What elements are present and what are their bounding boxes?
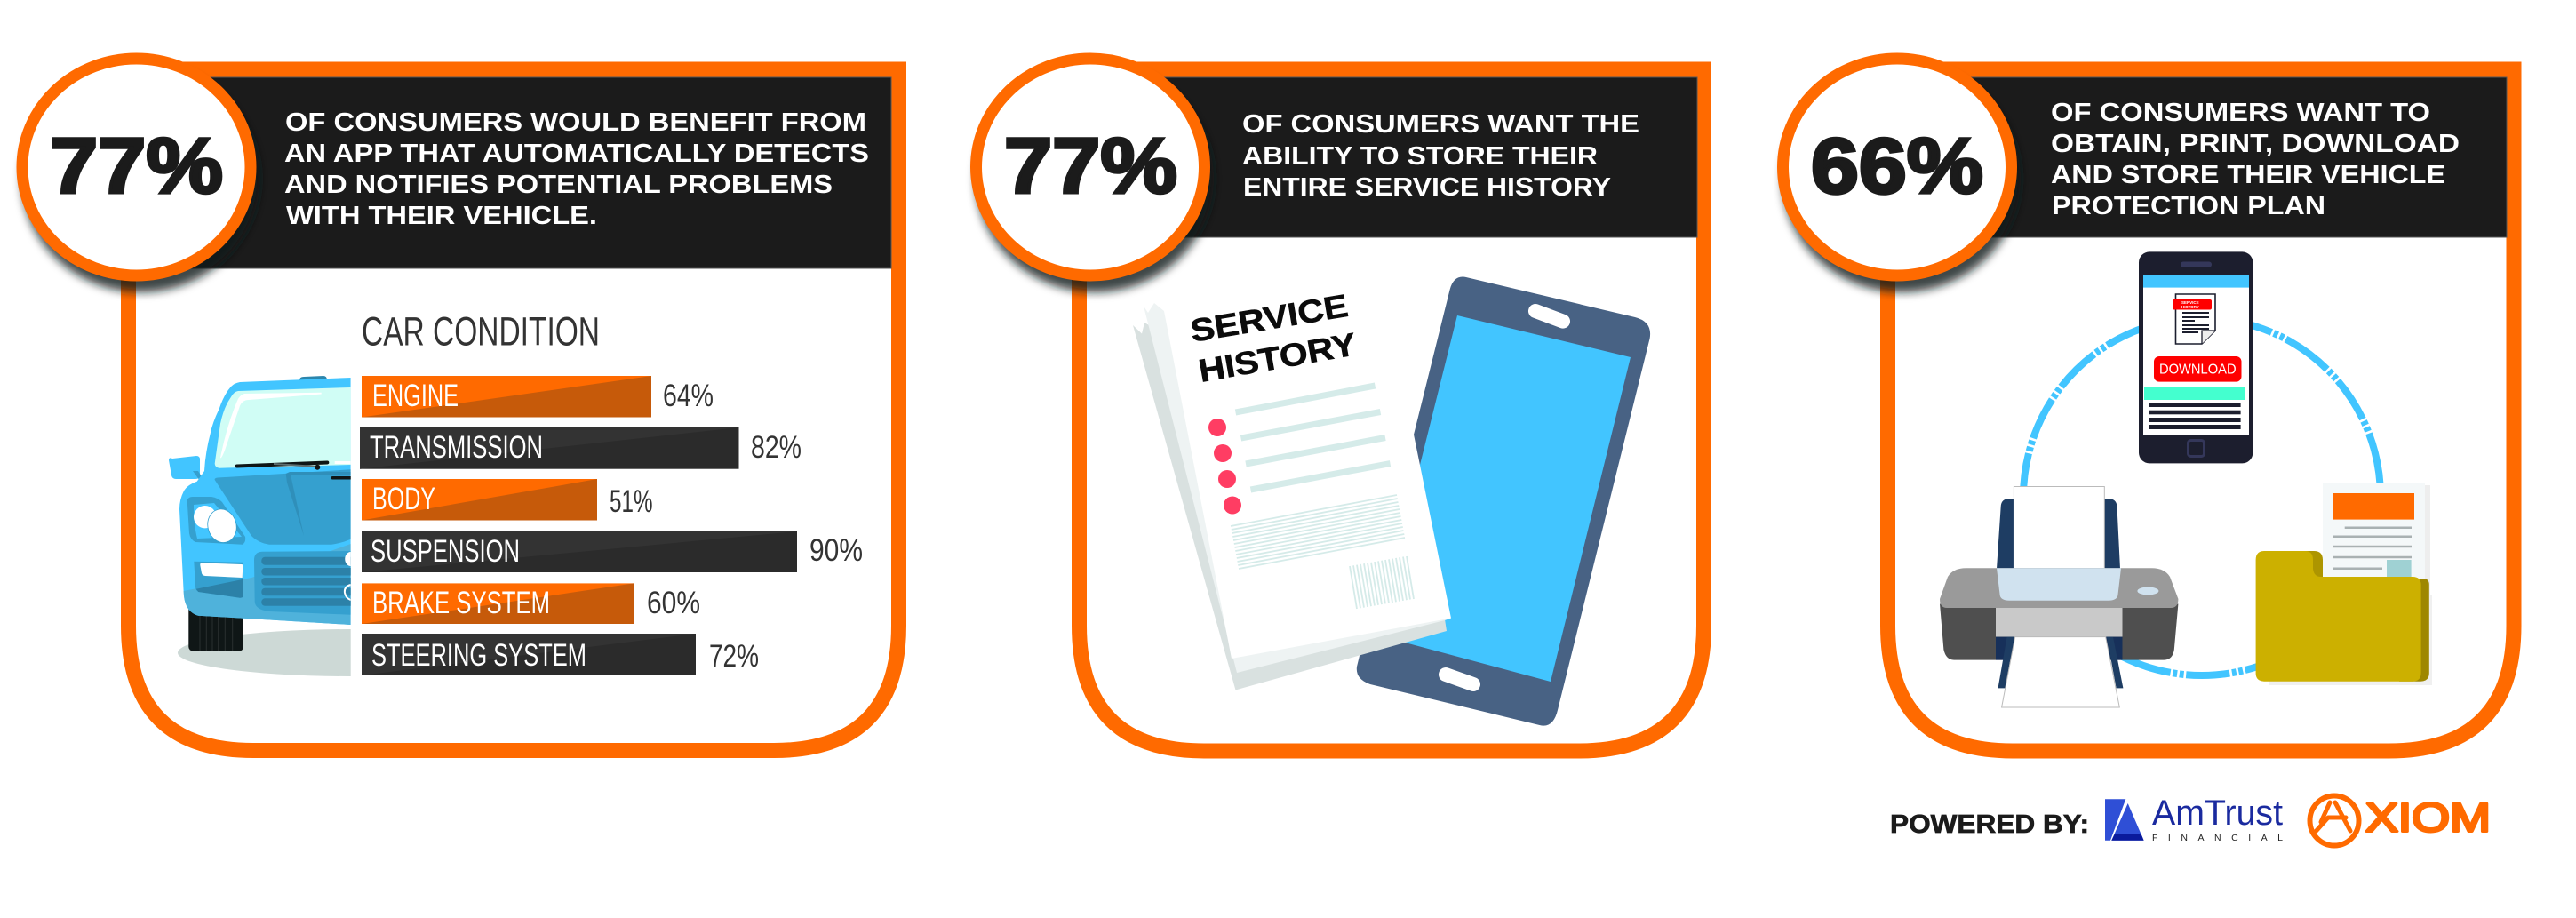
stat badge 77%: [976, 59, 1214, 292]
powered by label: POWERED BY:: [1890, 810, 2089, 839]
logo: AmTrust Financial: [2105, 794, 2283, 843]
bar: engine 64%: 64%: [663, 379, 714, 413]
bar: engine 64%: [362, 376, 714, 418]
bar: steering system 72%: 72%: [709, 639, 759, 674]
logo: Axiom: [2310, 794, 2491, 846]
bar: steering system 72%: [362, 634, 759, 675]
bar: suspension 90%: [362, 531, 863, 572]
header text 1: AN APP THAT AUTOMATICALLY DETECTS: [284, 140, 869, 168]
bar: brake system 60%: 60%: [647, 586, 700, 620]
header text 1: WITH THEIR VEHICLE.: [286, 202, 597, 230]
bar: brake system 60%: BRAKE SYSTEM: [372, 586, 550, 620]
icon: phone with download: SERVICE: [2181, 300, 2199, 305]
document title: SERVICE: [1188, 287, 1351, 349]
stat badge 77%: 77%: [50, 122, 223, 210]
bar: transmission 82%: TRANSMISSION: [370, 430, 543, 465]
icon: phone with download: DOWNLOAD: [2159, 363, 2237, 377]
header text 2: ABILITY TO STORE THEIR: [1242, 142, 1598, 171]
bar: steering system 72%: STEERING SYSTEM: [371, 638, 586, 673]
bar: body 51%: BODY: [372, 482, 435, 516]
logo: AmTrust Financial: FINANCIAL: [2152, 833, 2283, 843]
panel frame 3: [1887, 69, 2514, 751]
header text 3: OBTAIN, PRINT, DOWNLOAD: [2051, 130, 2460, 158]
bar: engine 64%: ENGINE: [372, 379, 459, 413]
logo: AmTrust Financial: AmTrust: [2152, 794, 2283, 833]
header text 2: [1242, 110, 1639, 202]
stat badge 77%: [21, 59, 259, 292]
icon: phone with download: HISTORY: [2181, 305, 2199, 309]
footer: powered by: [1890, 794, 2491, 846]
bar: suspension 90%: SUSPENSION: [371, 534, 520, 569]
icon: folder with document: [2256, 483, 2432, 685]
header text 2: OF CONSUMERS WANT THE: [1242, 110, 1639, 139]
bar: transmission 82%: [360, 427, 802, 469]
panel: vehicle protection plan: [1782, 59, 2514, 751]
header text 3: AND STORE THEIR VEHICLE: [2051, 161, 2445, 189]
panel: car condition: [21, 59, 899, 750]
header text 3: PROTECTION PLAN: [2052, 192, 2325, 220]
bar: suspension 90%: 90%: [809, 533, 863, 568]
stat badge 77%: 77%: [1004, 122, 1177, 210]
header text 1: AND NOTIFIES POTENTIAL PROBLEMS: [284, 171, 833, 199]
bar: transmission 82%: 82%: [751, 430, 802, 465]
header band 1: [136, 77, 891, 268]
icon: phone with download: [2139, 251, 2253, 463]
illustration: car front: [169, 376, 351, 676]
panel: service history: [976, 59, 1704, 751]
bar: brake system 60%: [362, 583, 700, 624]
illustration: service history document: [1133, 267, 1451, 690]
chart title: CAR CONDITION: [362, 309, 600, 354]
stat badge 66%: 66%: [1811, 122, 1983, 210]
header text 1: [284, 108, 869, 230]
panel frame 1: [128, 69, 899, 750]
header text 3: OF CONSUMERS WANT TO: [2051, 99, 2430, 127]
logo: Axiom: XIOM: [2365, 794, 2491, 841]
header text 2: ENTIRE SERVICE HISTORY: [1243, 173, 1611, 202]
bar: body 51%: 51%: [610, 484, 652, 519]
header text 1: OF CONSUMERS WOULD BENEFIT FROM: [285, 108, 866, 137]
header band 2: [1087, 77, 1697, 237]
document title: HISTORY: [1196, 325, 1359, 389]
dashed cycle ring: [2023, 318, 2381, 675]
stat badge 66%: [1782, 59, 2021, 292]
panel frame 2: [1079, 69, 1704, 751]
header band 3: [1895, 77, 2507, 237]
icon: smartphone: [1357, 277, 1650, 726]
bar: body 51%: [362, 479, 652, 521]
document title: [1188, 287, 1359, 389]
icon: printer: [1940, 487, 2178, 707]
header text 3: [2051, 99, 2460, 220]
